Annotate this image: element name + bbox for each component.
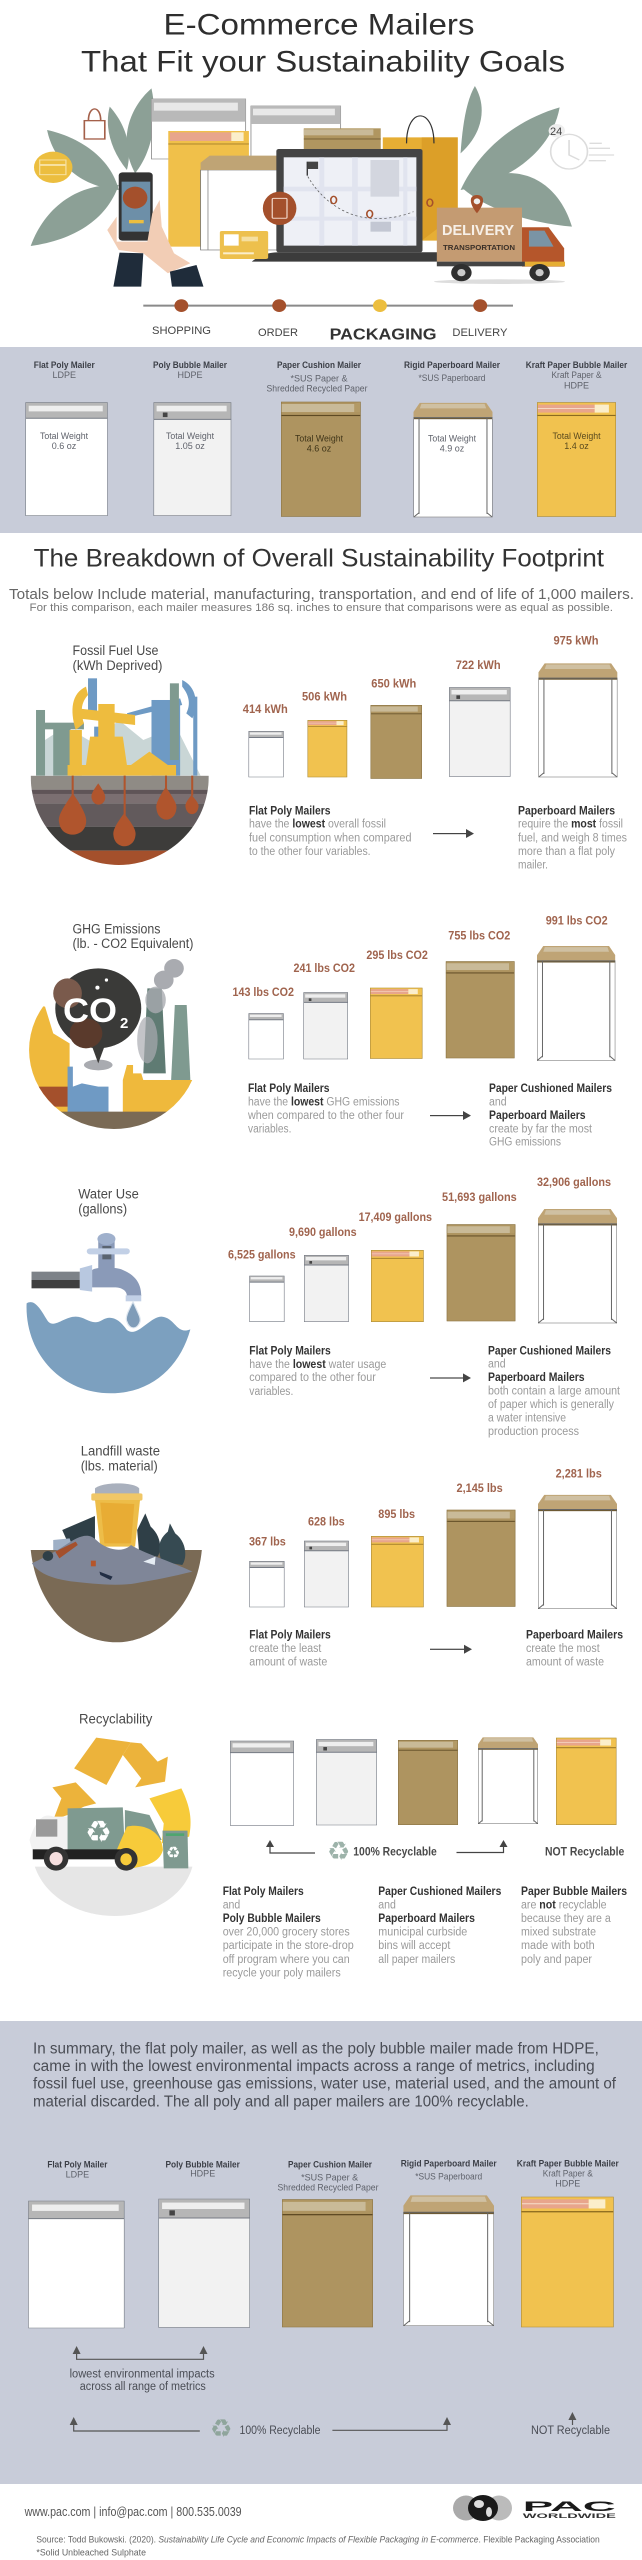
heading [72,921,194,951]
truck lettering: TRANSPORTATION [443,243,515,252]
values: 975 kWh [554,635,598,647]
text: paper bubble mailers: are not recyclable [521,1900,607,1912]
text: paper finding: Paperboard Mailers [489,1110,586,1122]
logo: PAC Worldwide: WORLDWIDE [523,2514,616,2520]
text: flat poly finding [247,1083,404,1135]
arrow: lowest impact bracket [73,2346,207,2359]
mailer column: flat poly: 0.6 oz [52,441,77,451]
mailer column: paper cushion: *SUS Paper & [290,374,348,384]
truck lettering: DELIVERY [442,222,514,239]
text: flat poly finding: Flat Poly Mailers [248,1083,330,1095]
mailer column: rigid paperboard: *SUS Paperboard [415,2171,482,2181]
mailer column: kraft paper bubble: HDPE [564,381,589,391]
icon: recycling truck: ♻ [85,1816,112,1849]
values: 755 lbs CO2 [448,930,510,942]
heading: breakdown: The Breakdown of Overall Sustainability Footprint [34,545,604,573]
label: lowest impacts [70,2368,215,2393]
summary text: came in with the lowest environmental impacts across a range of metrics, including [33,2058,595,2075]
mailer column: rigid paperboard [404,360,500,517]
text: paper finding [488,1345,621,1438]
heading: (gallons) [78,1201,127,1216]
text: paper mailers [378,1886,501,1966]
mailer column: flat poly [28,2159,125,2328]
arrow [430,1111,471,1120]
mailer column: rigid paperboard: Total Weight [428,434,476,444]
text: flat poly finding [249,1345,386,1398]
values: 241 lbs CO2 [294,963,355,975]
icon: left leaves [31,88,154,246]
text: poly mailers: recycle your poly mailers [223,1967,341,1979]
icon: oil pumps over ground layers [29,678,211,866]
text: flat poly finding: fuel consumption when compared [249,832,412,844]
text: poly mailers: participate in the store-drop [223,1940,354,1952]
text: poly mailers: over 20,000 grocery stores [223,1927,350,1939]
text: paperboard finding: more than a flat poly [518,846,615,858]
text: paper finding: both contain a large amount [488,1386,621,1398]
text: flat poly finding: Flat Poly Mailers [249,1630,331,1642]
values: 9,690 gallons [289,1227,357,1239]
text: flat poly finding: create the least [249,1643,322,1655]
text: paperboard finding: fuel, and weigh 8 times [518,832,627,844]
mailer column: rigid paperboard: Rigid Paperboard Mailer [404,360,500,370]
text: paper finding: of paper which is generally [488,1399,614,1411]
arrow: recyclable right [332,2417,451,2430]
label: 100% recyclable: 100% Recyclable [353,1847,437,1859]
heading: Water Use [78,1186,139,1201]
text: flat poly finding: Flat Poly Mailers [249,805,330,817]
icon: delivery truck [434,195,565,284]
text: paperboard finding: amount of waste [526,1656,604,1668]
text: poly mailers: and [223,1900,240,1912]
arrow [430,1645,472,1654]
arrow: recyclable left [266,1840,315,1853]
mailer column: poly bubble: HDPE [177,370,203,380]
icon: card badge [34,152,72,183]
hero illustration: e-commerce scene [31,86,614,312]
summary text: material discarded. The all poly and all paper mailers are 100% recyclable. [33,2093,529,2110]
mailer column: rigid paperboard: *SUS Paperboard [418,373,486,383]
mailer column: poly bubble: Poly Bubble Mailer [165,2159,240,2169]
mailer column: poly bubble: HDPE [190,2169,215,2179]
values: 414 kWh [243,704,288,716]
mailer column: flat poly: Total Weight [40,431,88,441]
text: poly mailers: Poly Bubble Mailers [223,1913,321,1925]
values: 2,145 lbs [456,1483,503,1495]
label: not recyclable: NOT Recyclable [531,2425,610,2437]
label: 100% recyclable: 100% Recyclable [240,2425,320,2437]
text: paper finding: create by far the most [489,1123,593,1135]
values: 722 kWh [456,660,501,672]
text: paper finding: and [489,1096,507,1108]
panel: landfill waste [31,1444,623,1668]
mailer column: kraft paper bubble: Total Weight [552,431,601,441]
text: paper finding: production process [488,1426,579,1438]
text: paper mailers: all paper mailers [378,1954,456,1966]
text: flat poly finding [249,1630,331,1668]
mailers scaled by value [248,946,615,1061]
source note [36,2535,600,2558]
mailer column: kraft paper bubble: HDPE [555,2179,580,2189]
values: 295 lbs CO2 [366,950,428,962]
mailer column: flat poly: LDPE [53,370,76,380]
title: That Fit your Sustainability Goals [81,46,565,78]
mailers scaled by value [249,1209,617,1323]
text: paper mailers: and [378,1900,396,1912]
icon: factories and CO2 bubble [25,959,201,1133]
text: paper finding: and [488,1359,506,1371]
timeline labels: ORDER [258,327,298,339]
text: flat poly finding: have the lowest GHG emissions [248,1096,400,1108]
truck lettering [442,222,515,252]
arrow [433,829,474,838]
icon: phone badge [263,192,296,225]
summary text: In summary, the flat poly mailer, as well as the poly bubble mailer made from HDPE, [33,2040,599,2057]
values: 17,409 gallons [359,1212,432,1224]
timeline line [143,305,513,307]
values: 367 lbs [249,1537,286,1549]
mailer column: rigid paperboard: 4.9 oz [440,444,465,454]
mailers scaled by value [248,663,617,779]
mailer column: poly bubble [153,360,231,516]
mailer column: paper cushion: 4.6 oz [307,444,332,454]
text: flat poly finding: compared to the other four [249,1372,376,1384]
text: paperboard finding [526,1630,623,1668]
mailers behind the laptop [151,99,381,250]
icon: landfill with bin and bags [31,1483,202,1642]
heading [81,1444,160,1474]
text: paper bubble mailers [521,1886,627,1966]
arrow: recyclable right [456,1840,508,1852]
mailer column: flat poly: LDPE [66,2170,89,2180]
text: paper bubble mailers: poly and paper [521,1954,592,1966]
title [81,8,565,78]
panel background [0,2021,642,2484]
timeline dots [174,299,487,312]
text: paperboard finding [518,805,627,871]
mailer column: poly bubble: 1.05 oz [175,441,205,451]
values [243,635,599,716]
mailer column: kraft paper bubble: Kraft Paper & [543,2169,593,2179]
mailers scaled by value [249,1495,617,1609]
panel: GHG emissions [25,915,615,1149]
panel: water use [27,1177,621,1438]
icon: factories and CO2 bubble: CO [63,992,117,1030]
text: paper finding: a water intensive [488,1413,566,1425]
icon: 24 hour clock [549,124,614,169]
panel: recyclability [29,1711,627,1979]
heading: (lbs. material) [81,1459,158,1474]
clock number: 24 [550,126,562,138]
icon: recycle symbol: ♻ [327,1836,350,1866]
text: flat poly finding: amount of waste [249,1656,327,1668]
values: 6,525 gallons [228,1249,296,1261]
mailer column: kraft paper bubble [517,2159,619,2327]
icon: shopping bag outline [84,109,105,139]
text: paper mailers: Paperboard Mailers [378,1913,475,1925]
intro text: Totals below Include material, manufacturing, transportation, and end of life of 1,000 mailers. [9,587,634,603]
heading: (kWh Deprived) [72,658,162,673]
mailer column: kraft paper bubble [526,360,628,517]
text: paper bubble mailers: made with both [521,1940,595,1952]
logo: PAC Worldwide [453,2495,616,2521]
heading [72,643,162,673]
values: 2,281 lbs [556,1469,602,1481]
text: paper finding: GHG emissions [489,1137,561,1149]
text: poly mailers: off program where you can [223,1954,350,1966]
timeline labels: PACKAGING [330,326,437,344]
timeline labels: DELIVERY [452,327,508,339]
icon: factories and CO2 bubble: 2 [120,1015,128,1032]
text: paper mailers: Paper Cushioned Mailers [378,1886,501,1898]
values [228,1177,611,1261]
text: paperboard finding: Paperboard Mailers [526,1630,623,1642]
mailer column: rigid paperboard [401,2159,497,2326]
icon: faucet and water [27,1233,190,1393]
footer contact: www.pac.com | info@pac.com | 800.535.0039 [24,2505,242,2519]
text: poly mailers [223,1886,354,1979]
values: 991 lbs CO2 [546,915,608,927]
values [232,915,608,999]
logo: PAC Worldwide: PAC [523,2498,616,2514]
values: 51,693 gallons [442,1192,517,1204]
intro text [9,587,634,614]
text: poly mailers: Flat Poly Mailers [223,1886,304,1898]
icon: phone and hand [107,172,203,287]
text: paper finding: Paper Cushioned Mailers [488,1345,611,1357]
icon: yellow shopping bag [383,116,458,241]
text: paper finding [489,1083,612,1149]
mailer column: flat poly: Flat Poly Mailer [34,360,95,370]
arrow: not recyclable [568,2412,576,2425]
label: not recyclable: NOT Recyclable [545,1847,624,1859]
summary text [33,2040,617,2110]
source note: *Solid Unbleached Sulphate [36,2548,146,2558]
text: flat poly finding: variables. [248,1123,291,1135]
intro text: For this comparison, each mailer measures 186 sq. inches to ensure that comparisons were as equal as possible. [30,602,613,614]
heading: GHG Emissions [72,921,161,936]
values: 628 lbs [308,1517,345,1529]
mailer column: paper cushion: Paper Cushion Mailer [288,2159,372,2169]
icon: payment card [220,231,268,259]
panel: summary [0,2021,642,2484]
values: 895 lbs [378,1509,415,1521]
values: 650 kWh [371,679,416,691]
text: flat poly finding: have the lowest water usage [249,1359,386,1371]
mailer column: flat poly [25,360,108,516]
label: lowest impacts: across all range of metrics [80,2381,206,2393]
text: flat poly finding: when compared to the other four [247,1110,404,1122]
icon: recycling truck: ♻ [166,1845,180,1862]
mailer column: poly bubble: Poly Bubble Mailer [153,360,227,370]
text: flat poly finding [249,805,412,858]
text: flat poly finding: variables. [249,1386,293,1398]
heading: Landfill waste [81,1444,160,1459]
mailer column: kraft paper bubble: Kraft Paper & [552,370,602,380]
timeline labels: SHOPPING [152,325,211,337]
panel: fossil fuel use [29,635,627,871]
text: paperboard finding: require the most fossil [518,819,623,831]
text: paper finding: Paperboard Mailers [488,1372,585,1384]
heading: Recyclability [79,1711,153,1726]
mailer column: poly bubble [158,2159,250,2328]
icon: laptop with delivery map [252,149,438,262]
arrow [430,1373,471,1382]
icon: recycling truck [29,1738,192,1916]
text: flat poly finding: have the lowest overall fossil [249,819,386,831]
mailer column: rigid paperboard: Rigid Paperboard Mailer [401,2159,497,2169]
title: E-Commerce Mailers [164,8,474,42]
values: 506 kWh [302,692,347,704]
heading [78,1186,139,1216]
panel background [0,347,642,533]
text: paperboard finding: Paperboard Mailers [518,805,615,817]
mailer column: paper cushion: Shredded Recycled Paper [266,384,368,394]
arrow: recyclable left [70,2417,200,2431]
mailer column: poly bubble: Total Weight [166,431,214,441]
text: paper bubble mailers: mixed substrate [521,1927,596,1939]
mailer column: kraft paper bubble: Kraft Paper Bubble Mailer [517,2159,619,2169]
panel: mailer comparison [0,347,642,533]
source note: Source: Todd Bukowski. (2020). Sustainability Life Cycle and Economic Impacts of Flexible Packaging in E-commerce. Flexible Packaging Association [36,2535,600,2545]
text: paper mailers: municipal curbside [378,1927,467,1939]
text: paper mailers: bins will accept [378,1940,451,1952]
timeline labels [152,325,508,344]
mailer column: paper cushion [266,360,368,517]
mailer column: paper cushion: Paper Cushion Mailer [277,360,361,370]
mailer column: kraft paper bubble: Kraft Paper Bubble Mailer [526,360,628,370]
label: lowest impacts: lowest environmental impacts [70,2368,215,2380]
text: paper bubble mailers: because they are a [521,1913,611,1925]
values [249,1469,602,1549]
mailer column: paper cushion: Total Weight [295,434,343,444]
mailer column: paper cushion: *SUS Paper & [301,2172,358,2182]
text: paper finding: Paper Cushioned Mailers [489,1083,612,1095]
mailer column: paper cushion: Shredded Recycled Paper [278,2182,378,2192]
mailer column: paper cushion [278,2159,378,2327]
mailer column: flat poly: Flat Poly Mailer [47,2159,108,2169]
values: 143 lbs CO2 [232,987,294,999]
text: paperboard finding: mailer. [518,859,548,871]
mailers [230,1737,616,1826]
heading: Fossil Fuel Use [72,643,158,658]
text: paper bubble mailers: Paper Bubble Mailers [521,1886,627,1898]
text: flat poly finding: Flat Poly Mailers [249,1345,331,1357]
mailer column: kraft paper bubble: 1.4 oz [564,441,589,451]
icon: recycle symbol: ♻ [210,2415,232,2443]
summary text: fossil fuel use, greenhouse gas emissions, water use, material used, and the amount of [33,2076,617,2093]
values: 32,906 gallons [537,1177,611,1189]
heading: (lb. - CO2 Equivalent) [72,936,194,951]
icon: right leaves [461,86,572,227]
text: flat poly finding: to the other four variables. [249,846,371,858]
text: paperboard finding: create the most [526,1643,600,1655]
